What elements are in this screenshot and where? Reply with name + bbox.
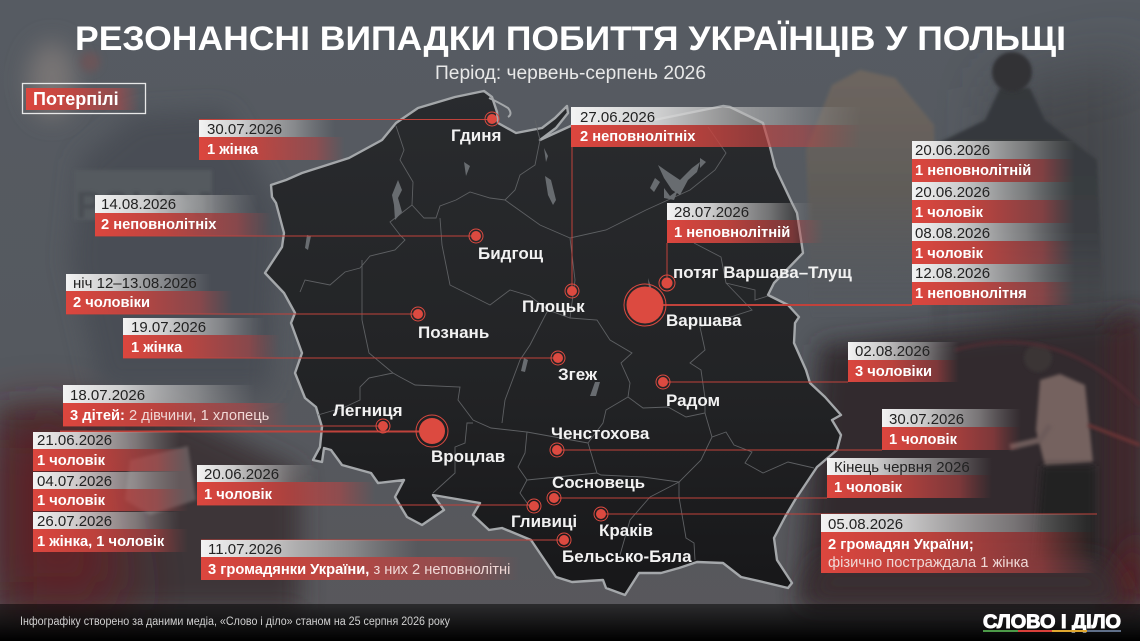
card: Краків 05.08.2026 [821, 514, 1097, 573]
card: Згеж 19.07.2026 [123, 318, 280, 358]
card: Бельсько-Бяла 11.07.2026 [201, 540, 520, 580]
map of Poland [265, 91, 841, 595]
city labels: Згеж [558, 365, 598, 384]
marker: Гдиня [485, 112, 499, 126]
card: Легниця 18.07.2026 [63, 385, 290, 426]
card: Краків 05.08.2026: фізично постраждала 1 жінка [828, 555, 1029, 571]
card: Вроцлав 04.07.2026: 04.07.2026 [37, 473, 112, 490]
card: Вроцлав 26.07.2026 [33, 512, 188, 552]
city labels: потяг Варшава–Тлущ [673, 263, 852, 282]
card: Радом 02.08.2026: 3 чоловіки [855, 364, 932, 380]
card: Радом 02.08.2026: 02.08.2026 [855, 343, 930, 360]
city labels: Бельсько-Бяла [562, 547, 692, 566]
card: Вроцлав 26.07.2026: 26.07.2026 [37, 513, 112, 530]
marker: Познань [411, 307, 425, 321]
marker: Гливиці [527, 499, 541, 513]
city labels: Бидгощ [478, 244, 544, 263]
marker: Вроцлав [416, 415, 448, 447]
card: Варшава 20.06.2026 чоловік: 1 чоловік [915, 205, 984, 221]
card: Вроцлав 04.07.2026: 1 чоловік [37, 493, 106, 509]
city labels: Радом [666, 391, 720, 410]
marker: Сосновець [547, 491, 561, 505]
card: Варшава 08.08.2026: 08.08.2026 [915, 225, 990, 242]
card: Варшава 20.06.2026: 20.06.2026 [915, 142, 990, 159]
legend [22, 84, 146, 114]
card: Сосновець кінець червня 2026: 1 чоловік [834, 480, 903, 496]
card: Гливиці 20.06.2026: 20.06.2026 [204, 466, 279, 483]
city labels: Краків [599, 521, 653, 540]
card: Бидгощ 14.08.2026 [95, 195, 272, 236]
card: Легниця 18.07.2026: 3 дітей: 2 дівчини, 1 хлопець [70, 408, 270, 424]
marker: Краків [594, 507, 608, 521]
marker: Легниця [376, 419, 390, 433]
footer bar [0, 604, 1140, 641]
card: Бельсько-Бяла 11.07.2026: 11.07.2026 [208, 541, 282, 558]
marker: Згеж [551, 351, 565, 365]
card: Познань ніч 12–13.08.2026: ніч 12–13.08.2026 [73, 275, 197, 292]
jacket lettering: POLICJA [76, 185, 241, 227]
legend: Потерпілі [33, 89, 119, 109]
card: Гливиці 20.06.2026: 1 чоловік [204, 487, 273, 503]
card: Познань ніч 12–13.08.2026: 2 чоловіки [73, 295, 150, 311]
card: Плоцьк 27.06.2026: 2 неповнолітніх [580, 129, 696, 145]
marker: Варшава [624, 284, 666, 326]
marker: Радом [656, 375, 670, 389]
card: Варшава 12.08.2026: 12.08.2026 [915, 265, 990, 282]
card: Варшава 20.06.2026 [912, 141, 1075, 182]
Hel peninsula [489, 98, 510, 117]
card: Варшава 12.08.2026 [912, 264, 1075, 305]
card: Вроцлав 04.07.2026 [33, 472, 188, 511]
card: Гдиня 30.07.2026 [199, 120, 345, 160]
card: Згеж 19.07.2026: 1 жінка [131, 340, 183, 356]
leader lines [60, 120, 1097, 540]
card: Бельсько-Бяла 11.07.2026: 3 громадянки України, з них 2 неповнолітні [208, 562, 510, 578]
card: Познань ніч 12–13.08.2026 [66, 274, 233, 314]
card: Варшава 12.08.2026: 1 неповнолітня [915, 286, 1027, 302]
card: потяг 28.07.2026 [667, 203, 824, 243]
card: Легниця 18.07.2026: 18.07.2026 [70, 387, 145, 404]
card: Краків 05.08.2026: 2 громадян України; [828, 537, 974, 553]
card: Варшава 20.06.2026 чоловік: 20.06.2026 [915, 184, 990, 201]
city labels: Вроцлав [431, 447, 505, 466]
regional borders [300, 120, 814, 560]
card: Варшава 20.06.2026: 1 неповнолітній [915, 163, 1031, 179]
marker: Ченстохова [550, 443, 564, 457]
source note: Інфографіку створено за даними медіа, «Слово і діло» станом на 25 серпня 2026 року [20, 616, 450, 628]
card: Гдиня 30.07.2026: 30.07.2026 [207, 121, 282, 138]
card: Згеж 19.07.2026: 19.07.2026 [131, 319, 206, 336]
logo: Слово і діло: СЛОВО І ДІЛО [983, 612, 1121, 633]
card: Плоцьк 27.06.2026 [571, 107, 861, 147]
card: Гдиня 30.07.2026: 1 жінка [207, 142, 259, 158]
title: РЕЗОНАНСНІ ВИПАДКИ ПОБИТТЯ УКРАЇНЦІВ У ПОЛЬЩІ [75, 20, 1066, 58]
marker: Бидгощ [469, 229, 483, 243]
card: Ченстохова 30.07.2026 [882, 409, 1021, 450]
card: Ченстохова 30.07.2026: 30.07.2026 [889, 411, 964, 428]
city labels: Гливиці [511, 512, 577, 531]
card: потяг 28.07.2026: 28.07.2026 [674, 204, 749, 221]
city labels: Ченстохова [551, 424, 650, 443]
card: потяг 28.07.2026: 1 неповнолітній [674, 225, 790, 241]
lakes [305, 148, 706, 396]
card: Плоцьк 27.06.2026: 27.06.2026 [580, 109, 655, 126]
marker: Плоцьк [565, 284, 579, 298]
card: Сосновець кінець червня 2026 [827, 458, 992, 498]
card: Сосновець кінець червня 2026: Кінець червня 2026 [834, 459, 970, 476]
card: Ченстохова 30.07.2026: 1 чоловік [889, 432, 958, 448]
city labels: Варшава [666, 311, 742, 330]
card: Бидгощ 14.08.2026: 14.08.2026 [101, 196, 176, 213]
city labels: Сосновець [552, 473, 645, 492]
card: Варшава 08.08.2026: 1 чоловік [915, 246, 984, 262]
city labels [333, 126, 852, 566]
marker: Бельсько-Бяла [557, 533, 571, 547]
card: Вроцлав 21.06.2026: 1 чоловік [37, 453, 106, 469]
city labels: Познань [418, 323, 489, 342]
card: Варшава 08.08.2026 [912, 223, 1075, 264]
city labels: Гдиня [451, 126, 501, 145]
country outline [265, 91, 841, 595]
card: Вроцлав 21.06.2026: 21.06.2026 [37, 432, 112, 449]
card: Варшава 20.06.2026 чоловік [912, 182, 1075, 223]
card: Радом 02.08.2026 [848, 342, 959, 382]
card: Гливиці 20.06.2026 [197, 465, 375, 505]
marker: потяг Варшава–Тлущ [659, 275, 675, 291]
city labels: Легниця [333, 401, 403, 420]
subtitle: Період: червень-серпень 2026 [435, 63, 706, 84]
card: Краків 05.08.2026: 05.08.2026 [828, 516, 903, 533]
card: Вроцлав 26.07.2026: 1 жінка, 1 чоловік [37, 534, 165, 550]
card: Бидгощ 14.08.2026: 2 неповнолітніх [101, 217, 217, 233]
card: Вроцлав 21.06.2026 [33, 432, 188, 471]
city labels: Плоцьк [522, 297, 585, 316]
